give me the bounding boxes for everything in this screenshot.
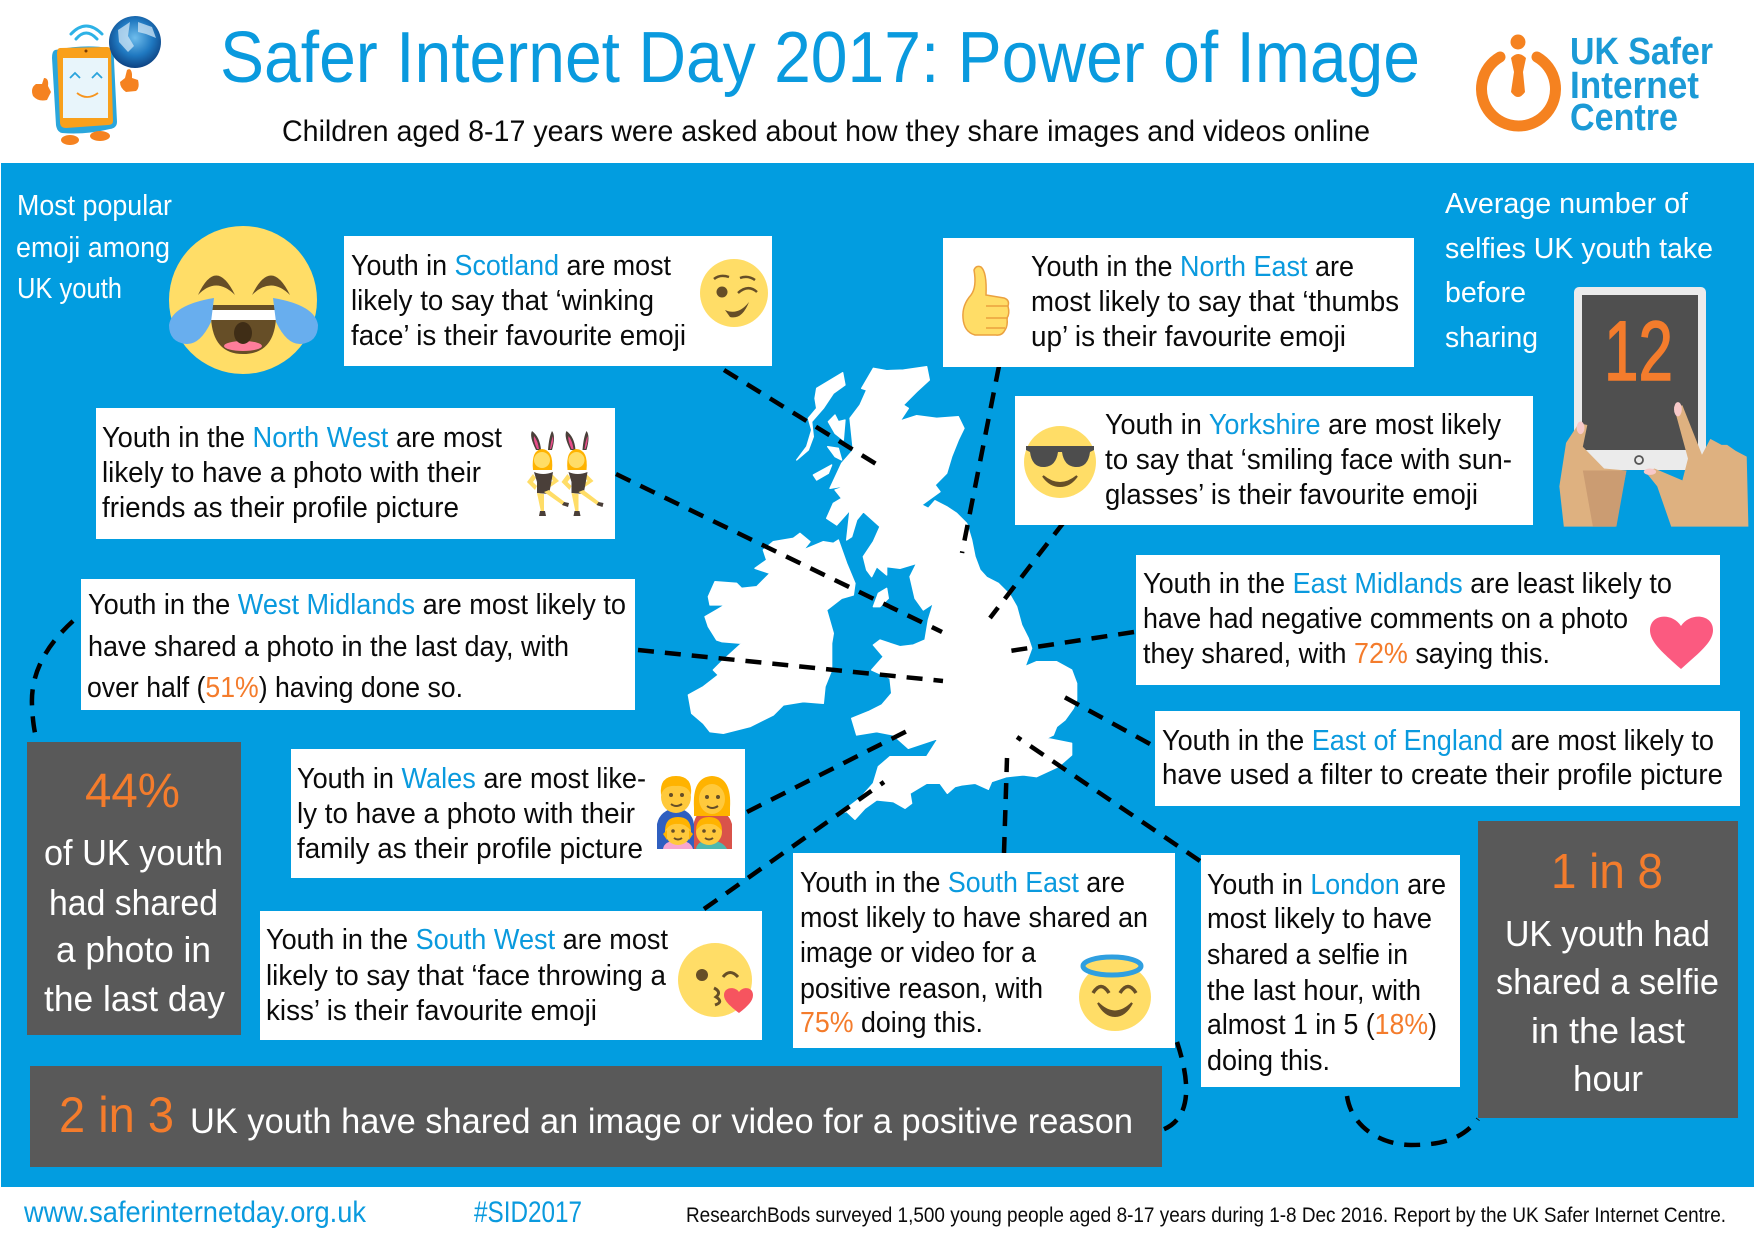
text: average number of selfies [1445,188,1713,354]
title: Safer Internet Day 2017: Power of Image [220,18,1420,98]
logo: UK Safer Internet Centre: UK Safer [1570,31,1713,73]
icon: face throwing a kiss [678,943,753,1017]
arrow: Yorkshire connector [990,522,1064,618]
arrow: North East connector [962,366,999,553]
panel: 1 in 8 statistic: in the last [1531,1010,1685,1051]
panel: London: most likely to have [1207,903,1432,935]
panel: North West: friends as their profile picture [102,492,459,524]
panel: West Midlands: over half (51%) having done so. [87,672,463,704]
text: average number of selfies: selfies UK youth take [1445,233,1713,265]
panel: East Midlands: have had negative comments on a photo [1143,603,1628,635]
panel: North East: most likely to say that ‘thumbs [1031,286,1399,318]
arrow: South East to 2 in 3 curve [1159,1042,1186,1131]
panel: 1 in 8 statistic: shared a selfie [1496,961,1719,1002]
icon: smiling tablet mascot with globe [32,16,161,145]
panel: Scotland: Youth in Scotland are most [351,250,671,282]
panel: Scotland: face’ is their favourite emoji [351,320,686,352]
panel: East Midlands: Youth in the East Midlands are least likely to [1143,568,1672,600]
icon: family [657,776,732,849]
icon: tablet with hands showing 12 [1559,287,1748,527]
panel: Yorkshire: Youth in Yorkshire are most likely [1105,409,1501,441]
text: average number of selfies: before [1445,277,1526,309]
footer: hashtag: #SID2017 [474,1196,582,1229]
arrow: West Midlands connector [638,650,943,681]
panel: Scotland: likely to say that ‘winking [351,285,654,317]
panel: West Midlands: have shared a photo in the last day, with [88,631,569,663]
panel: Yorkshire: to say that ‘smiling face with sun- [1105,444,1512,476]
panel: South East: image or video for a [800,937,1037,969]
text: most popular emoji: emoji among [16,232,170,264]
panel: North East: Youth in the North East are [1031,251,1354,283]
logo: UK Safer Internet Centre: Centre [1570,97,1678,139]
panel: London: Youth in London are [1207,869,1446,901]
icon: tablet with hands showing 12: 12 [1604,304,1673,398]
panel: South East: most likely to have shared an [800,902,1148,934]
text: most popular emoji: Most popular [17,190,172,222]
text: average number of selfies: sharing [1445,322,1538,354]
panel: South West: likely to say that ‘face throwing a [266,960,667,992]
logo: UK Safer Internet Centre: Internet [1570,65,1699,107]
panel: London: doing this. [1207,1045,1330,1077]
icon: thumbs up [963,266,1009,335]
panel: South East: positive reason, with [800,973,1043,1005]
panel: South West: kiss’ is their favourite emoji [266,995,597,1027]
arrow: London connector [1017,737,1200,861]
panel: North East [943,238,1414,367]
panel: 1 in 8 statistic: hour [1573,1058,1643,1099]
panel: London [1201,855,1460,1087]
map: Great Britain and Ireland [688,367,1077,819]
panel: London: the last hour, with [1207,975,1421,1007]
panel: North West: likely to have a photo with their [102,457,481,489]
panel: North West [96,408,615,539]
panel: Yorkshire: glasses’ is their favourite emoji [1105,479,1478,511]
panel: 2 in 3 statistic: 2 in 3 [59,1087,174,1143]
panel: West Midlands [81,579,635,710]
panel: East of England: Youth in the East of England are most likely to [1162,725,1714,757]
panel: 1 in 8 statistic [1478,821,1738,1118]
arrow: East of England connector [1057,693,1150,744]
panel: East Midlands [1136,555,1720,685]
icon: women with bunny ears [527,431,604,516]
arrow: Scotland connector [724,370,881,467]
footer: website: www.saferinternetday.org.uk [23,1196,367,1229]
panel: East of England [1155,711,1740,806]
panel: 44% statistic: 44% [85,765,180,818]
icon: face with tears of joy [169,226,318,374]
arrow: North West connector [616,474,942,632]
panel: North West: Youth in the North West are most [102,422,502,454]
panel: London: shared a selfie in [1207,939,1408,971]
icon: smiling face with halo [1079,957,1151,1031]
panel: 2 in 3 statistic: UK youth have shared an image or video for a positive reason [190,1102,1133,1141]
logo: UK Safer Internet Centre [1482,31,1713,139]
panel: 44% statistic: had shared [49,882,218,923]
panel: South West: Youth in the South West are most [266,924,668,956]
text: most popular emoji [16,190,172,305]
subtitle: Children aged 8-17 years were asked about how they share images and videos online [282,115,1370,148]
panel: 44% statistic: the last day [44,978,225,1019]
arrow: London to 1 in 8 curve [1347,1096,1478,1145]
icon: winking face [700,259,768,327]
panel: Scotland [344,236,772,366]
panel: West Midlands: Youth in the West Midlands are most likely to [88,589,626,621]
panel: 2 in 3 statistic [30,1066,1162,1167]
panel: Wales: family as their profile picture [297,833,643,865]
panel: South East [793,853,1175,1048]
icon: smiling face with sunglasses [1024,426,1096,498]
panel: South West [260,911,762,1040]
panel: Wales: ly to have a photo with their [297,798,635,830]
icon: heart [1650,617,1713,669]
panel: South East: 75% doing this. [800,1007,983,1039]
panel: 1 in 8 statistic: UK youth had [1505,913,1710,954]
panel: 44% statistic: of UK youth [44,832,223,873]
panel: East Midlands: they shared, with 72% saying this. [1143,638,1550,670]
arrow: East Midlands connector [1003,632,1134,652]
panel: Yorkshire [1015,396,1533,525]
panel: 44% statistic: a photo in [56,929,211,970]
arrow: South West connector [704,782,884,909]
panel: Wales: Youth in Wales are most like- [297,763,646,795]
panel: 1 in 8 statistic: 1 in 8 [1551,845,1663,899]
text: most popular emoji: UK youth [17,273,122,305]
panel: London: almost 1 in 5 (18%) [1207,1009,1437,1041]
text: average number of selfies: Average number of [1445,188,1689,220]
arrow: West Midlands to 44% curve [32,621,73,744]
arrow: South East connector [1004,758,1007,853]
panel: Wales [291,749,745,878]
panel: 44% statistic [27,742,241,1035]
panel: South East: Youth in the South East are [800,867,1125,899]
panel: North East: up’ is their favourite emoji [1031,321,1346,353]
panel: East of England: have used a filter to create their profile picture [1162,759,1723,791]
arrow: Wales connector [747,728,913,812]
